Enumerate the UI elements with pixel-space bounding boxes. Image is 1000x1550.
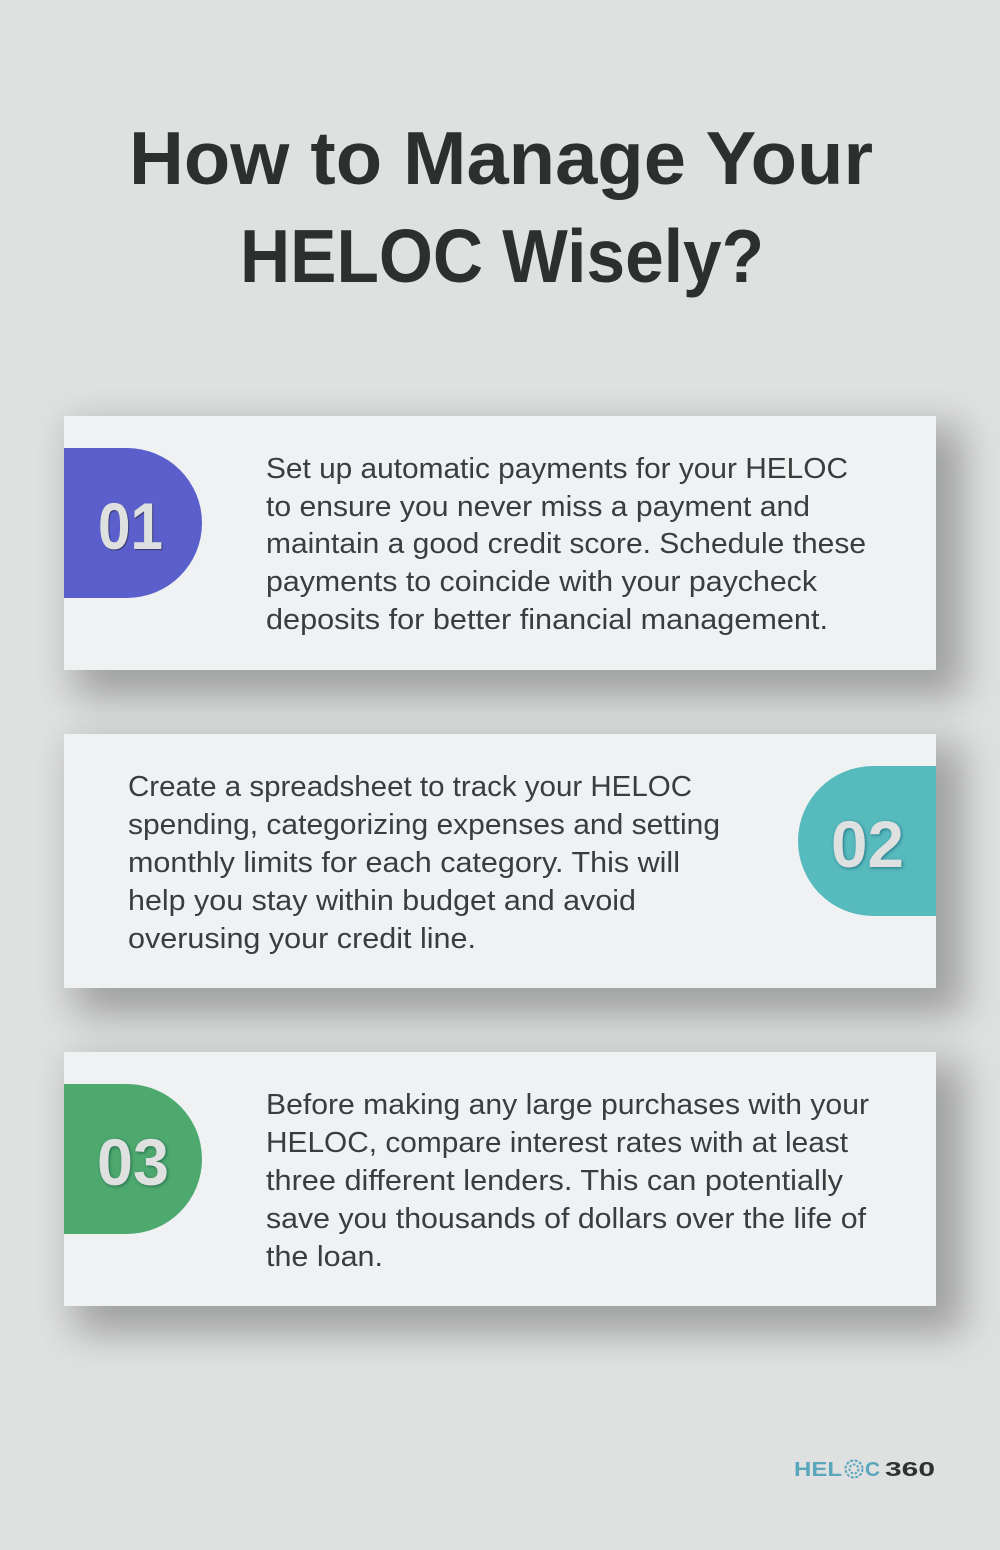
title	[129, 116, 873, 298]
text: step 3 description: Before making any large purchases with your	[266, 1089, 869, 1121]
text: step 1 description: maintain a good credit score. Schedule these	[266, 528, 866, 560]
title: HELOC Wisely?	[240, 214, 764, 298]
text: step 3 description: the loan.	[266, 1241, 383, 1273]
badge: 03	[64, 1084, 202, 1234]
badge: 03: 03	[97, 1125, 169, 1199]
text: step 3 description: three different lenders. This can potentially	[266, 1165, 844, 1197]
panel: step 3	[64, 1052, 936, 1306]
badge: 02	[798, 766, 936, 916]
text: step 2 description: Create a spreadsheet to track your HELOC	[128, 771, 692, 803]
text: step 2 description: help you stay within budget and avoid	[128, 885, 636, 917]
panel: step 2	[64, 734, 936, 988]
badge: 01	[64, 448, 202, 598]
text: step 1 description: payments to coincide with your paycheck	[266, 566, 818, 598]
logo: HELOC360: 360	[885, 1459, 935, 1481]
text: step 1 description	[266, 453, 866, 636]
text: step 2 description	[128, 771, 720, 955]
text: step 2 description: monthly limits for each category. This will	[128, 847, 680, 879]
badge: 01: 01	[98, 489, 163, 563]
text: step 3 description: HELOC, compare interest rates with at least	[266, 1127, 848, 1159]
text: step 1 description: to ensure you never miss a payment and	[266, 491, 810, 523]
text: step 1 description: deposits for better financial management.	[266, 604, 828, 636]
text: step 1 description: Set up automatic payments for your HELOC	[266, 453, 848, 485]
text: step 2 description: overusing your credit line.	[128, 923, 476, 955]
title: How to Manage Your	[129, 116, 873, 200]
badge: 02: 02	[831, 807, 904, 881]
panel: step 1	[64, 416, 936, 670]
text: step 2 description: spending, categorizing expenses and setting	[128, 809, 720, 841]
logo: HELOC360: C	[865, 1459, 880, 1481]
logo: HELOC360: HEL	[794, 1459, 842, 1481]
text: step 3 description	[266, 1089, 869, 1273]
text: step 3 description: save you thousands of dollars over the life of	[266, 1203, 867, 1235]
